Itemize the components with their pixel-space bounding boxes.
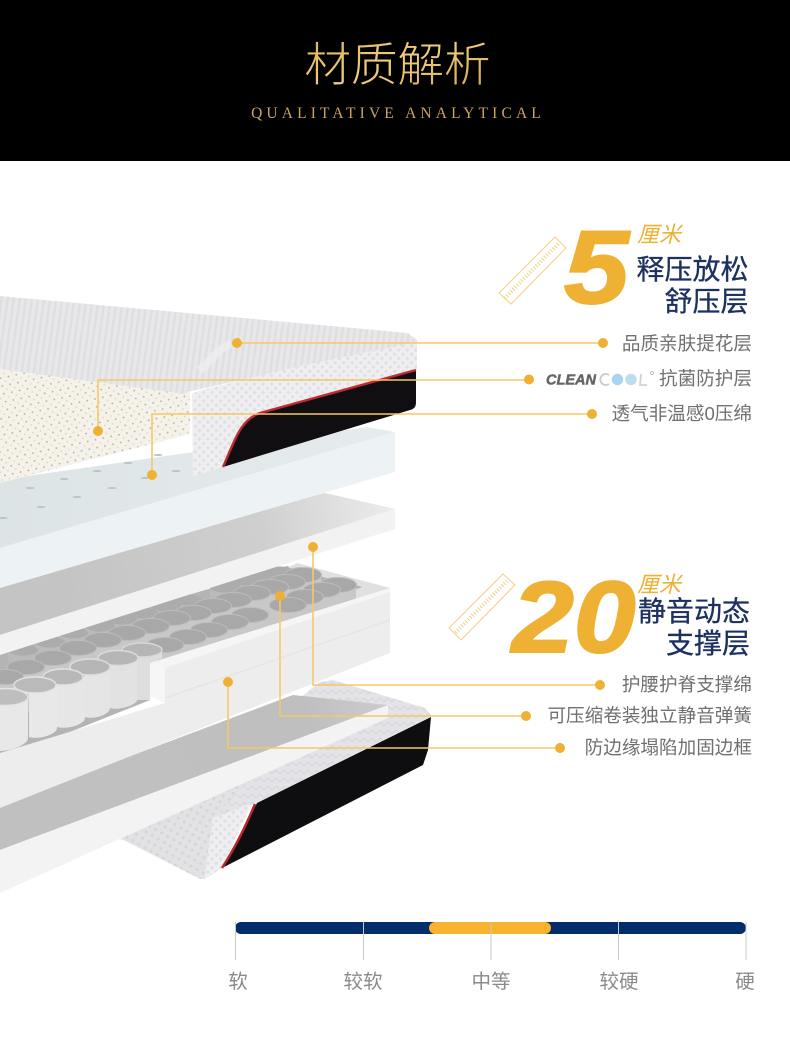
subtitle: QUALITATIVE ANALYTICAL	[251, 105, 545, 122]
scale labels: 硬	[735, 971, 755, 993]
spring layer	[0, 563, 390, 808]
scale labels: 较硬	[599, 971, 639, 993]
scale labels: 中等	[471, 971, 511, 993]
leader: cleancool layer	[93, 374, 534, 436]
label: antibacterial: 抗菌防护层	[659, 368, 752, 389]
scale labels	[228, 971, 755, 993]
label: memory foam: 透气非温感0压绵	[612, 403, 752, 424]
heading: support layer: 支撑层	[666, 628, 750, 659]
icon: ruler 20cm	[449, 574, 515, 640]
heading: comfort layer: 释压放松	[636, 254, 748, 285]
unit 20cm: 厘米	[637, 572, 683, 597]
blue comfort foam	[0, 427, 395, 588]
front coils	[0, 643, 162, 751]
label: support foam: 护腰护脊支撑绵	[622, 674, 752, 695]
heading: comfort layer: 舒压层	[664, 286, 748, 317]
scale labels: 软	[228, 971, 248, 993]
unit 5cm: 厘米	[637, 222, 683, 247]
label: springs: 可压缩卷装独立静音弹簧	[547, 705, 752, 726]
leader: memory foam	[147, 409, 597, 480]
number 5: 5	[564, 210, 630, 326]
scale bar	[235, 922, 746, 934]
leader: jacquard layer	[232, 338, 608, 348]
firmness scale	[228, 922, 755, 993]
logo: cleancool	[546, 372, 654, 388]
header band	[0, 0, 790, 161]
leader lines	[93, 338, 608, 753]
scale labels: 较软	[343, 971, 383, 993]
leader: springs	[275, 591, 531, 721]
heading: support layer: 静音动态	[638, 596, 750, 627]
label: jacquard: 品质亲肤提花层	[622, 333, 752, 354]
logo: cleancool: CLEAN	[546, 372, 596, 388]
title: 材质解析	[304, 28, 490, 95]
heading: support layer	[638, 596, 750, 659]
leader: support foam	[308, 542, 605, 690]
top quilted cover	[0, 296, 417, 476]
bottom foam	[0, 695, 388, 893]
heading: comfort layer	[636, 254, 748, 317]
bottom cover	[120, 680, 432, 880]
mattress exploded illustration	[0, 296, 432, 893]
latex layer	[0, 369, 190, 483]
icon: ruler 5cm	[499, 237, 566, 304]
number 20: 20	[510, 562, 636, 674]
label: edge frame: 防边缘塌陷加固边框	[585, 737, 752, 758]
middle foam layer	[0, 493, 395, 655]
scale marker	[429, 922, 551, 934]
leader: edge frame	[223, 677, 565, 753]
